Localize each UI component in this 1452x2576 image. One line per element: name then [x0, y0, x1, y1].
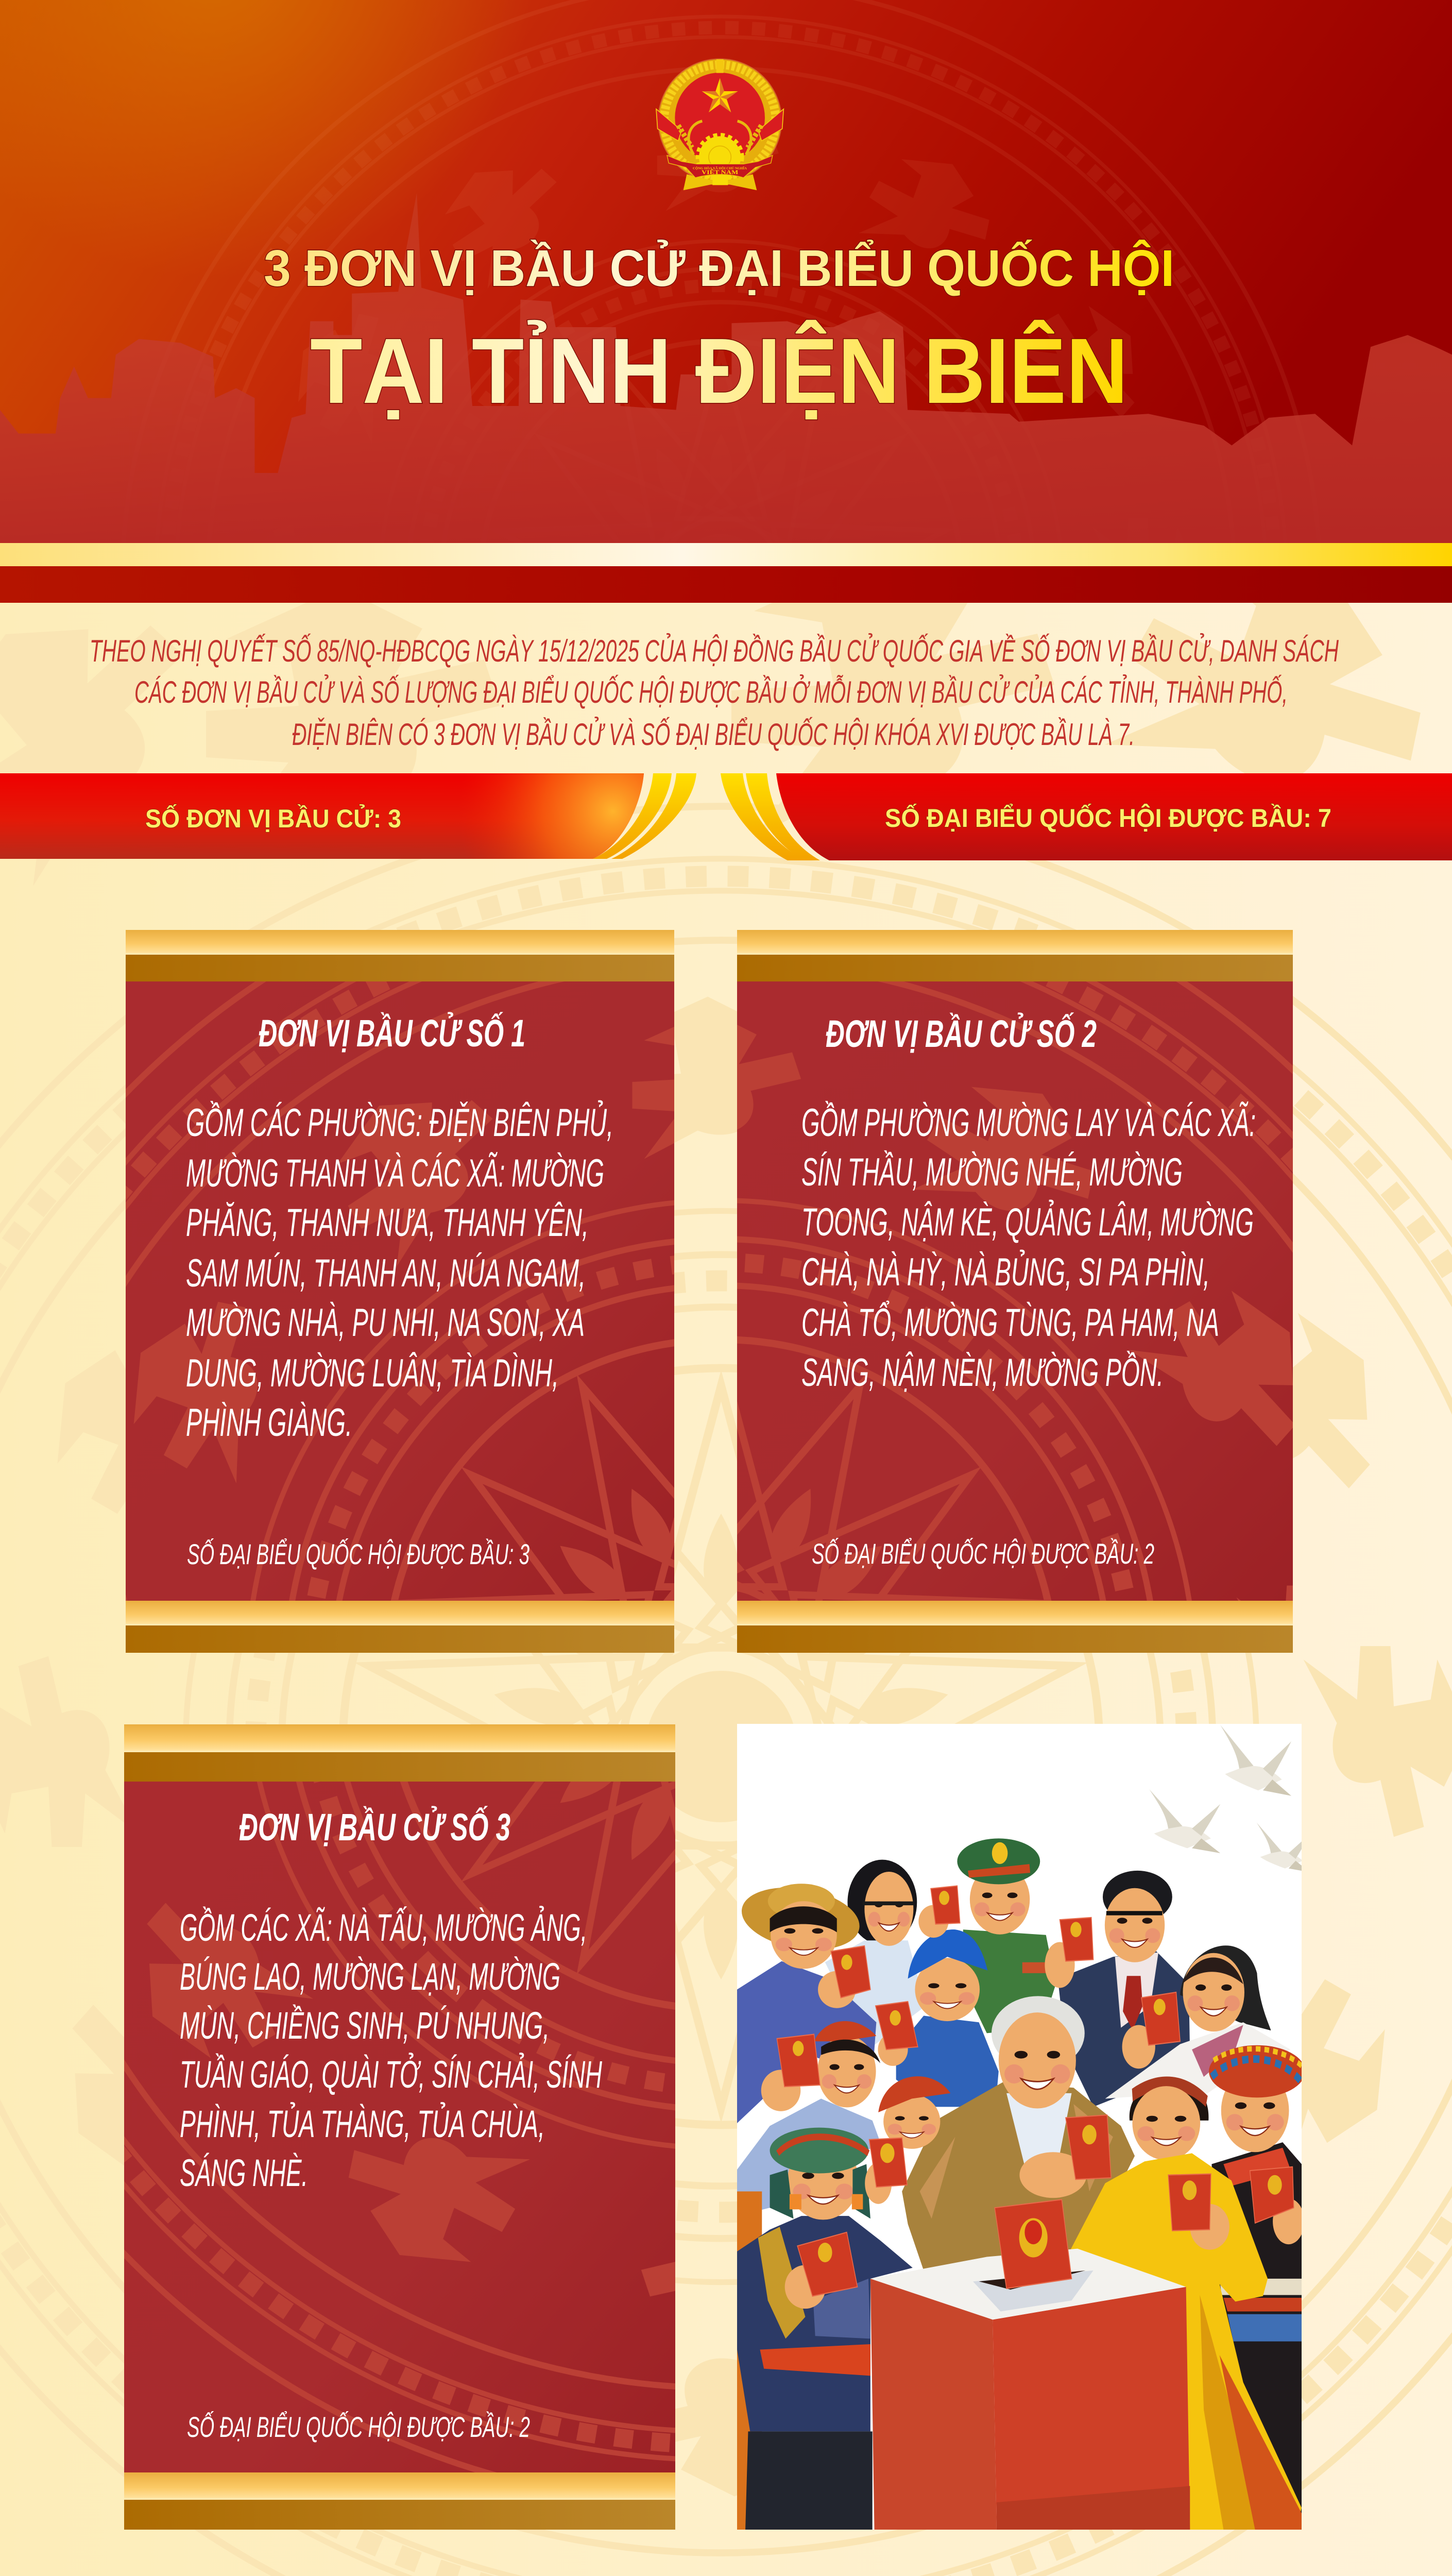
ribbon: number of constituencies: [0, 770, 721, 863]
doves: [1149, 1725, 1310, 1872]
ward list: PHÌNH GIÀNG.: [186, 1401, 352, 1445]
back row people: [737, 1838, 1291, 2123]
ribbon: number of constituencies: SỐ ĐƠN VỊ BẦU CỬ: 3: [145, 804, 401, 833]
middle row people: [737, 1996, 1135, 2270]
icon: national emblem: [656, 58, 783, 190]
header gold and red bands: [0, 543, 1452, 603]
header banner: [0, 0, 1452, 603]
ribbon: number of deputies: SỐ ĐẠI BIỂU QUỐC HỘI ĐƯỢC BẦU: 7: [885, 803, 1331, 833]
title: [264, 240, 1174, 423]
panel: constituency 1: [126, 930, 674, 1653]
ballot box: [870, 2199, 1190, 2530]
icon: national emblem: VIỆT NAM: [702, 168, 738, 176]
title: 3 ĐƠN VỊ BẦU CỬ ĐẠI BIỂU QUỐC HỘI: [264, 240, 1174, 297]
illustration: voters around ballot box: [737, 1724, 1302, 2530]
icon: national emblem: CỘNG HÒA XÃ HỘI CHỦ NGHĨA: [693, 166, 747, 170]
heading: ĐƠN VỊ BẦU CỬ SỐ 3: [239, 1806, 510, 1849]
heading: ĐƠN VỊ BẦU CỬ SỐ 1: [259, 1012, 525, 1055]
city skyline silhouette: [0, 193, 1452, 543]
front row people: [737, 2045, 1305, 2530]
commune list: [180, 1906, 602, 2194]
panel: constituency 3: [124, 1724, 675, 2530]
ribbon: number of deputies: [716, 770, 1452, 863]
hands holding red voter cards: [761, 1886, 1304, 2309]
ward list: [801, 1101, 1256, 1395]
commune list: SÁNG NHÈ.: [180, 2151, 308, 2194]
title: TẠI TỈNH ĐIỆN BIÊN: [310, 319, 1128, 423]
panel: constituency 2: [737, 930, 1293, 1653]
page background pattern: [2, 603, 1452, 2576]
heading: ĐƠN VỊ BẦU CỬ SỐ 2: [826, 1012, 1097, 1055]
intro text block: [90, 633, 1339, 752]
ward list: [186, 1100, 613, 1445]
